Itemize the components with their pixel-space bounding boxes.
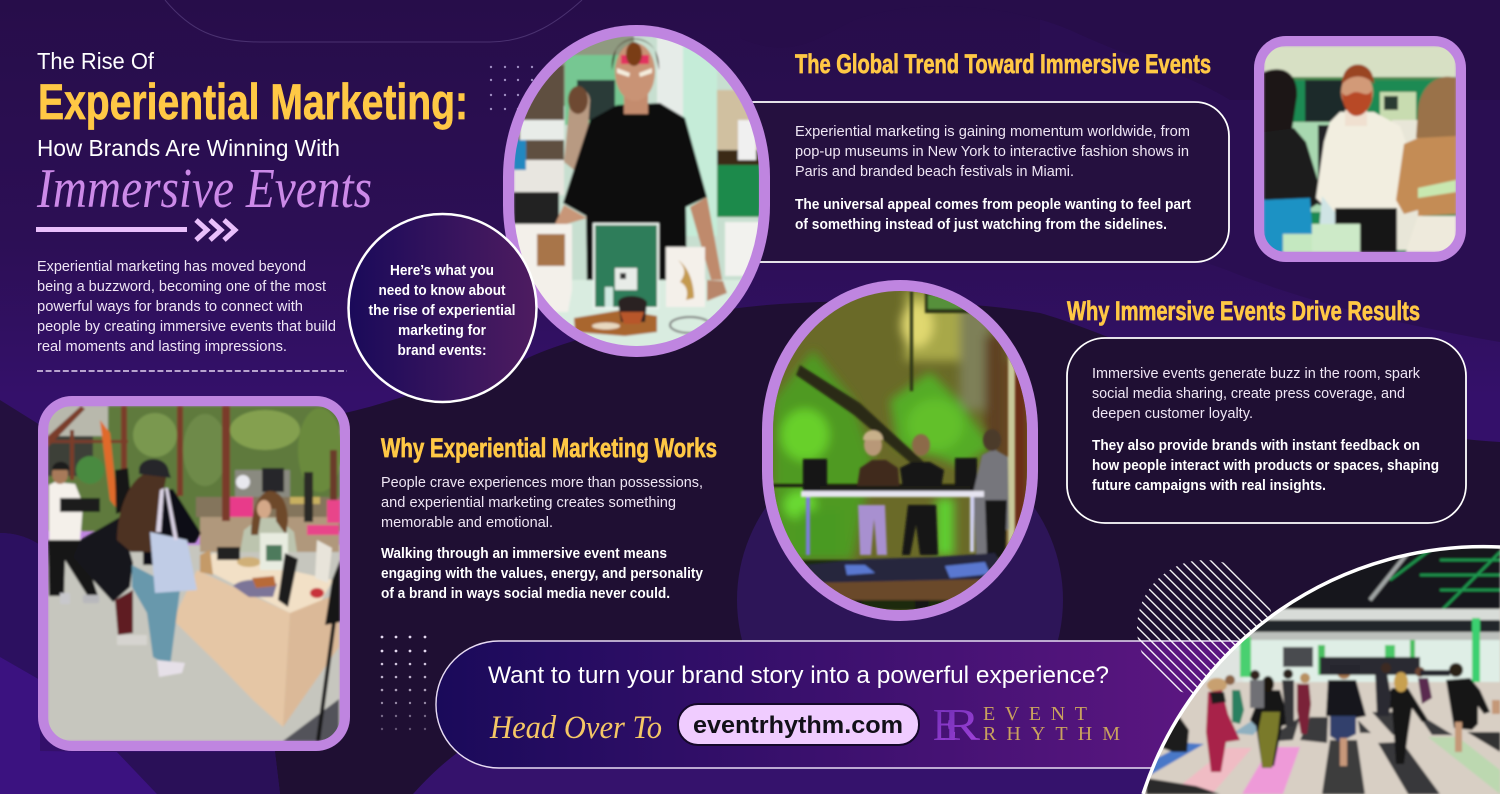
intro paragraph: people by creating immersive events that build [37, 318, 336, 335]
panel: why experiential marketing works [381, 433, 717, 602]
yoga photo white arc [1143, 547, 1500, 794]
panel: global trend text box: Experiential marketing is gaining momentum worldwide, from [795, 123, 1190, 140]
event rhythm logo: E [933, 699, 957, 750]
arrow divider [36, 220, 235, 240]
panel: global trend text box: Paris and branded beach festivals in Miami. [795, 163, 1074, 180]
panel: why experiential marketing works: memorable and emotional. [381, 514, 553, 531]
panel: why experiential marketing works: engaging with the values, energy, and personality [381, 565, 704, 582]
title line: how brands are winning with: How Brands Are Winning With [37, 135, 340, 161]
panel: why immersive events drive results [1067, 338, 1466, 523]
panel: why experiential marketing works: of a brand in ways social media never could. [381, 585, 670, 602]
event rhythm logo: EVENT [983, 703, 1087, 725]
callout circle: here's what you need to know: brand events: [398, 342, 486, 359]
panel: why experiential marketing works: and experiential marketing creates something [381, 494, 676, 511]
website pill: eventrhythm.com [693, 712, 903, 739]
dot grid top [490, 66, 533, 110]
panel: why immersive events drive results: deepen customer loyalty. [1092, 405, 1253, 422]
heading: global trend: The Global Trend Toward Immersive Events [795, 49, 1211, 79]
panel: why immersive events drive results: They also provide brands with instant feedback on [1092, 437, 1420, 454]
website pill [678, 704, 919, 745]
callout circle: here's what you need to know: the rise of experiential [368, 302, 516, 319]
intro paragraph: being a buzzword, becoming one of the most [37, 278, 327, 295]
panel: global trend text box: pop-up museums in New York to interactive fashion shows in [795, 143, 1189, 160]
panel: why immersive events drive results: Immersive events generate buzz in the room, spark [1092, 365, 1420, 382]
heading: why experiential marketing works: Why Experiential Marketing Works [381, 433, 717, 463]
dot grid bottom [381, 636, 426, 730]
event rhythm logo: R [943, 699, 980, 750]
photo: yoga class [1140, 547, 1500, 794]
panel: why experiential marketing works: People crave experiences more than possessions, [381, 474, 703, 491]
callout circle: here's what you need to know [348, 214, 536, 402]
cta question: Want to turn your brand story into a powerful experience? [488, 662, 1109, 689]
panel: why immersive events drive results: future campaigns with real insights. [1092, 477, 1326, 494]
title line: the rise of: The Rise Of [37, 48, 155, 74]
event rhythm logo: RHYTHM [983, 723, 1120, 745]
title block [36, 48, 468, 220]
intro paragraph: real moments and lasting impressions. [37, 338, 287, 355]
panel: global trend text box: The universal appeal comes from people wanting to feel part [795, 196, 1191, 213]
panel: global trend text box [720, 102, 1229, 262]
hatch pattern [1137, 560, 1272, 694]
title line: immersive events: Immersive Events [36, 158, 372, 220]
callout circle: here's what you need to know: need to know about [378, 282, 506, 299]
photo: man in white shirt talking [1254, 36, 1466, 262]
panel: why immersive events drive results: how people interact with products or spaces, shaping [1092, 457, 1439, 474]
intro paragraph: Experiential marketing has moved beyond [37, 258, 306, 275]
callout circle: here's what you need to know: marketing for [398, 322, 486, 339]
callout circle: here's what you need to know: Here’s what you [390, 262, 494, 279]
cta script lead-in: Head Over To [489, 710, 662, 746]
event rhythm logo [933, 699, 1120, 750]
panel: why experiential marketing works: Walking through an immersive event means [381, 545, 667, 562]
title line: experiential marketing: Experiential Marketing: [38, 74, 468, 130]
call to action banner [436, 641, 1296, 768]
panel: why immersive events drive results: social media sharing, create press coverage, and [1092, 385, 1405, 402]
intro paragraph: powerful ways for brands to connect with [37, 298, 303, 315]
intro paragraph [37, 258, 336, 355]
photo: woman at product table [503, 25, 770, 357]
photo: outdoor product booth [38, 396, 350, 751]
panel: global trend text box: of something instead of just watching from the sidelines. [795, 216, 1167, 233]
photo: DJs among green bamboo [762, 280, 1038, 621]
